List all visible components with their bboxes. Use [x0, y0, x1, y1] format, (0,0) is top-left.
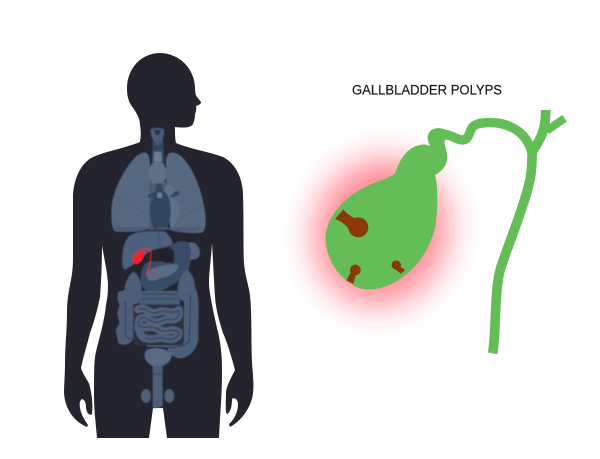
right lung [166, 152, 206, 233]
diaphragm top organs [112, 227, 205, 232]
transverse colon [139, 291, 180, 305]
bile duct red [143, 249, 151, 275]
bladder [144, 348, 172, 367]
thymus [149, 161, 167, 185]
second hepatic branch [547, 118, 565, 131]
common bile duct [493, 110, 546, 353]
liver fissure [158, 231, 161, 247]
gallbladder body [326, 128, 450, 289]
transverse colon haustra [142, 294, 178, 299]
bile ducts [437, 110, 565, 353]
small intestine bed [133, 305, 184, 345]
aorta centre [157, 193, 162, 198]
tracheal rings [153, 152, 162, 162]
small right polyp [392, 260, 405, 274]
heart right side [164, 184, 179, 229]
ascending colon line [125, 302, 133, 338]
mediastinum fill [149, 182, 168, 230]
pancreas [147, 264, 178, 281]
urethra [153, 366, 163, 408]
small gallbladder red [132, 249, 144, 264]
left testis [141, 389, 151, 403]
large polyp [335, 209, 368, 237]
duodenum [142, 282, 168, 290]
human body silhouette [64, 53, 253, 438]
abdominal organs [112, 227, 205, 408]
liver [122, 231, 172, 270]
trachea column [151, 140, 165, 167]
small intestine loops [138, 309, 179, 339]
cystic duct [437, 123, 532, 152]
upper organs: lungs, throat and heart [111, 128, 206, 233]
stomach [141, 241, 191, 291]
small lower polyp [346, 265, 361, 284]
heart shadow [152, 218, 157, 231]
small intestine inner lines [138, 309, 179, 339]
title: GALLBLADDER POLYPS [352, 82, 502, 98]
descending colon and sigmoid [147, 285, 199, 358]
dark cavity [158, 248, 174, 263]
right testis [164, 389, 174, 403]
gallbladder glow [295, 141, 467, 323]
spleen [188, 242, 200, 260]
lung fissures [113, 197, 205, 231]
descending colon line [167, 295, 191, 347]
right kidney [124, 272, 142, 304]
larynx [151, 128, 164, 145]
left kidney [177, 269, 195, 302]
gallbladder diagram [326, 110, 565, 353]
heart [148, 183, 179, 231]
left lung [111, 153, 152, 232]
ascending colon [116, 289, 133, 345]
thyroid [154, 130, 161, 135]
urethra cap [153, 372, 163, 375]
